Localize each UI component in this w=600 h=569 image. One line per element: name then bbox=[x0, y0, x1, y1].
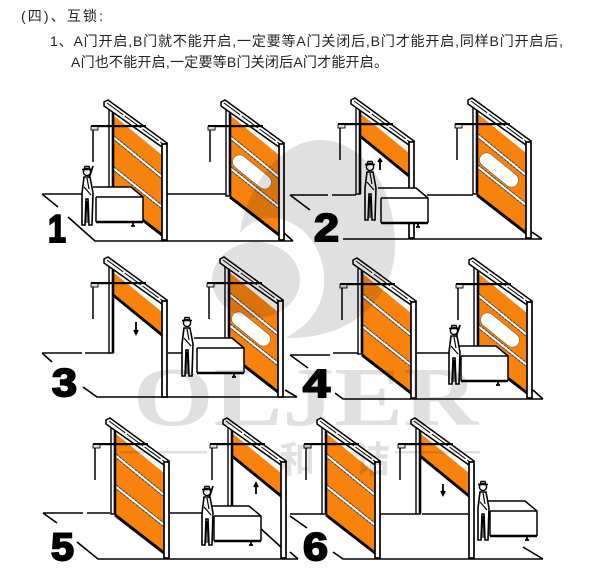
person bbox=[449, 325, 460, 384]
title: (四)、互锁: bbox=[21, 8, 103, 24]
person bbox=[202, 486, 213, 545]
text line 2: A门也不能开启,一定要等B门关闭后A门才能开启。 bbox=[71, 54, 388, 70]
watermark logo bbox=[120, 140, 480, 480]
person bbox=[182, 318, 193, 376]
cargo box bbox=[211, 506, 261, 545]
door A closed bbox=[304, 418, 380, 558]
number 1: 1 bbox=[48, 208, 66, 251]
number 5: 5 bbox=[51, 526, 74, 569]
number 3: 3 bbox=[52, 362, 77, 405]
door B closed with window bbox=[208, 100, 284, 240]
watermark logo: 和 bbox=[279, 439, 315, 480]
down arrow bbox=[441, 484, 445, 495]
door B closed with window bbox=[456, 258, 532, 398]
person bbox=[478, 482, 489, 540]
up arrow bbox=[254, 483, 258, 494]
cargo box bbox=[458, 346, 508, 385]
cargo box bbox=[378, 188, 428, 227]
watermark logo: OLJER bbox=[133, 351, 480, 444]
number 2: 2 bbox=[314, 207, 339, 250]
door A closed bbox=[340, 258, 416, 398]
door B opening bbox=[210, 418, 286, 558]
up arrow bbox=[378, 159, 382, 170]
panel 3 bbox=[42, 257, 297, 405]
door A closed bbox=[91, 100, 167, 240]
panel 6 bbox=[290, 418, 543, 569]
panel 4 bbox=[290, 258, 543, 406]
door A closing bbox=[91, 257, 167, 397]
number 4: 4 bbox=[303, 363, 330, 406]
text line 1: 1、A门开启,B门就不能开启,一定要等A门关闭后,B门才能开启,同样B门开启后, bbox=[50, 33, 563, 49]
door A opening bbox=[338, 98, 414, 238]
cargo box bbox=[194, 338, 244, 377]
door B closing bbox=[398, 418, 474, 558]
panel 2 bbox=[290, 98, 542, 250]
person bbox=[365, 162, 376, 220]
panel 1 bbox=[42, 100, 293, 251]
panel 5 bbox=[43, 418, 298, 569]
down arrow bbox=[134, 322, 138, 334]
person bbox=[82, 166, 93, 225]
door B closed with window bbox=[207, 257, 283, 397]
door A closed bbox=[93, 418, 169, 558]
watermark logo: 诘 bbox=[354, 439, 390, 480]
number 6: 6 bbox=[303, 526, 328, 569]
cargo box bbox=[93, 187, 143, 226]
cargo box bbox=[487, 501, 537, 540]
door B closed with window bbox=[455, 98, 531, 238]
